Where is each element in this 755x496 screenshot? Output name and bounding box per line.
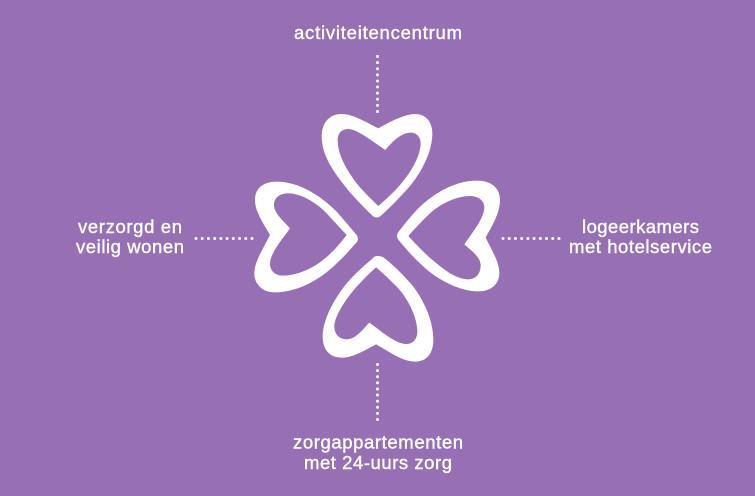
label: verzorgd en veilig wonen: veilig wonen xyxy=(76,236,184,257)
label: activiteitencentrum: activiteitencentrum xyxy=(294,22,462,43)
heart: top xyxy=(322,114,432,217)
dotted connector: left xyxy=(196,237,252,240)
label: zorgappartementen met 24-uurs zorg: zorgappartementen xyxy=(293,432,463,452)
label: logeerkamers met hotelservice: logeerkamers xyxy=(582,216,699,237)
label: zorgappartementen met 24-uurs zorg: met 24-uurs zorg xyxy=(304,452,452,473)
dotted connector: right xyxy=(503,237,559,240)
heart: left xyxy=(254,182,358,292)
heart: right xyxy=(397,181,500,291)
label: logeerkamers met hotelservice: met hotelservice xyxy=(569,236,712,257)
label: zorgappartementen met 24-uurs zorg xyxy=(293,432,463,473)
label: logeerkamers met hotelservice xyxy=(569,216,712,257)
label: verzorgd en veilig wonen xyxy=(76,216,184,257)
dotted connector: top xyxy=(376,56,379,112)
dotted connector: bottom xyxy=(376,364,379,420)
label: verzorgd en veilig wonen: verzorgd en xyxy=(78,216,182,237)
icon: four-heart clover xyxy=(254,114,500,362)
heart: bottom xyxy=(323,256,433,362)
